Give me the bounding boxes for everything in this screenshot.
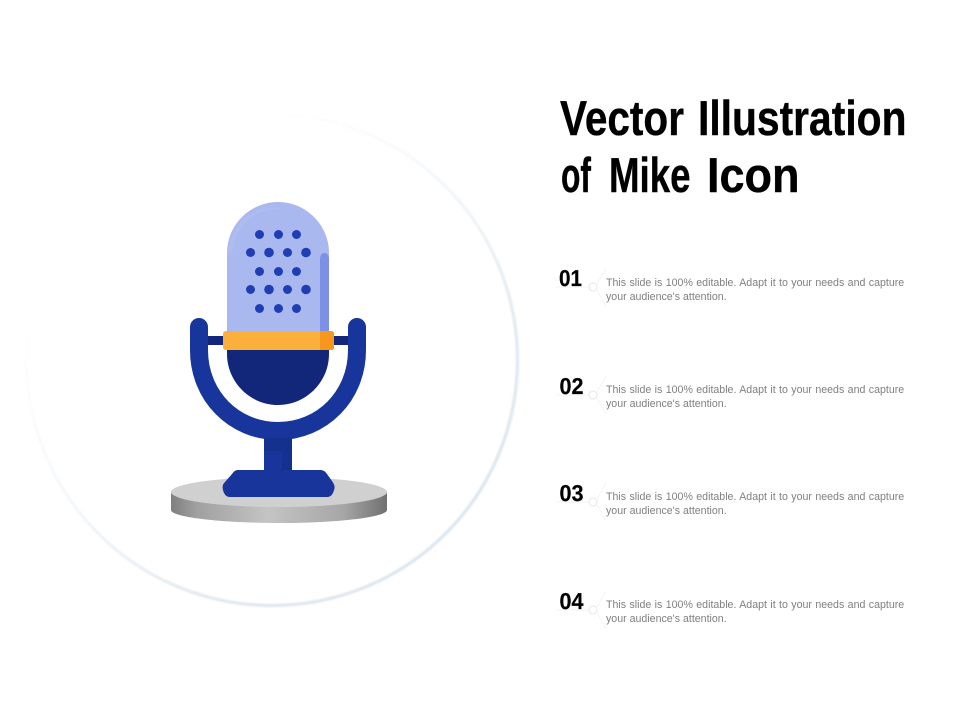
text block: item 3 [606,490,904,516]
item 3 number and connector [556,480,606,521]
item 1 number and connector [556,265,606,306]
text block: item 4: your audience's attention. [606,612,727,624]
collar band [223,331,334,350]
text block: item 1 [606,276,904,302]
title: Vector [560,92,684,146]
title: Illustration [698,92,906,146]
title: Icon [707,149,800,203]
icon: microphone [171,202,387,523]
text block: item 1: This slide is 100% editable. Adapt it to your needs and capture [606,276,904,288]
mic head [227,202,329,333]
text block: item 3: This slide is 100% editable. Adapt it to your needs and capture [606,490,904,502]
text block: item 2: your audience's attention. [606,398,727,410]
stem [264,438,292,472]
text block: item 4: This slide is 100% editable. Adapt it to your needs and capture [606,598,904,610]
text block: item 4 [606,598,904,624]
side connectors [208,336,348,345]
foot [223,470,335,497]
item 2 number and connector: 02 [560,373,584,399]
title: of [561,149,591,203]
title: Mike [609,149,690,203]
text block: item 1: your audience's attention. [606,290,727,302]
item 2 number and connector [556,373,606,414]
text block: item 2: This slide is 100% editable. Adapt it to your needs and capture [606,384,904,396]
item 3 number and connector: 03 [560,480,584,506]
grille dots [246,230,311,313]
lower capsule [227,349,329,405]
text block: item 2 [606,384,904,410]
item 4 number and connector [556,588,606,629]
yoke cradle [199,327,357,431]
title [560,92,906,203]
item 1 number and connector: 01 [559,265,582,291]
panel: circle backdrop [26,114,518,606]
item 4 number and connector: 04 [560,588,584,614]
stand base disc [171,477,387,523]
text block: item 3: your audience's attention. [606,504,727,516]
